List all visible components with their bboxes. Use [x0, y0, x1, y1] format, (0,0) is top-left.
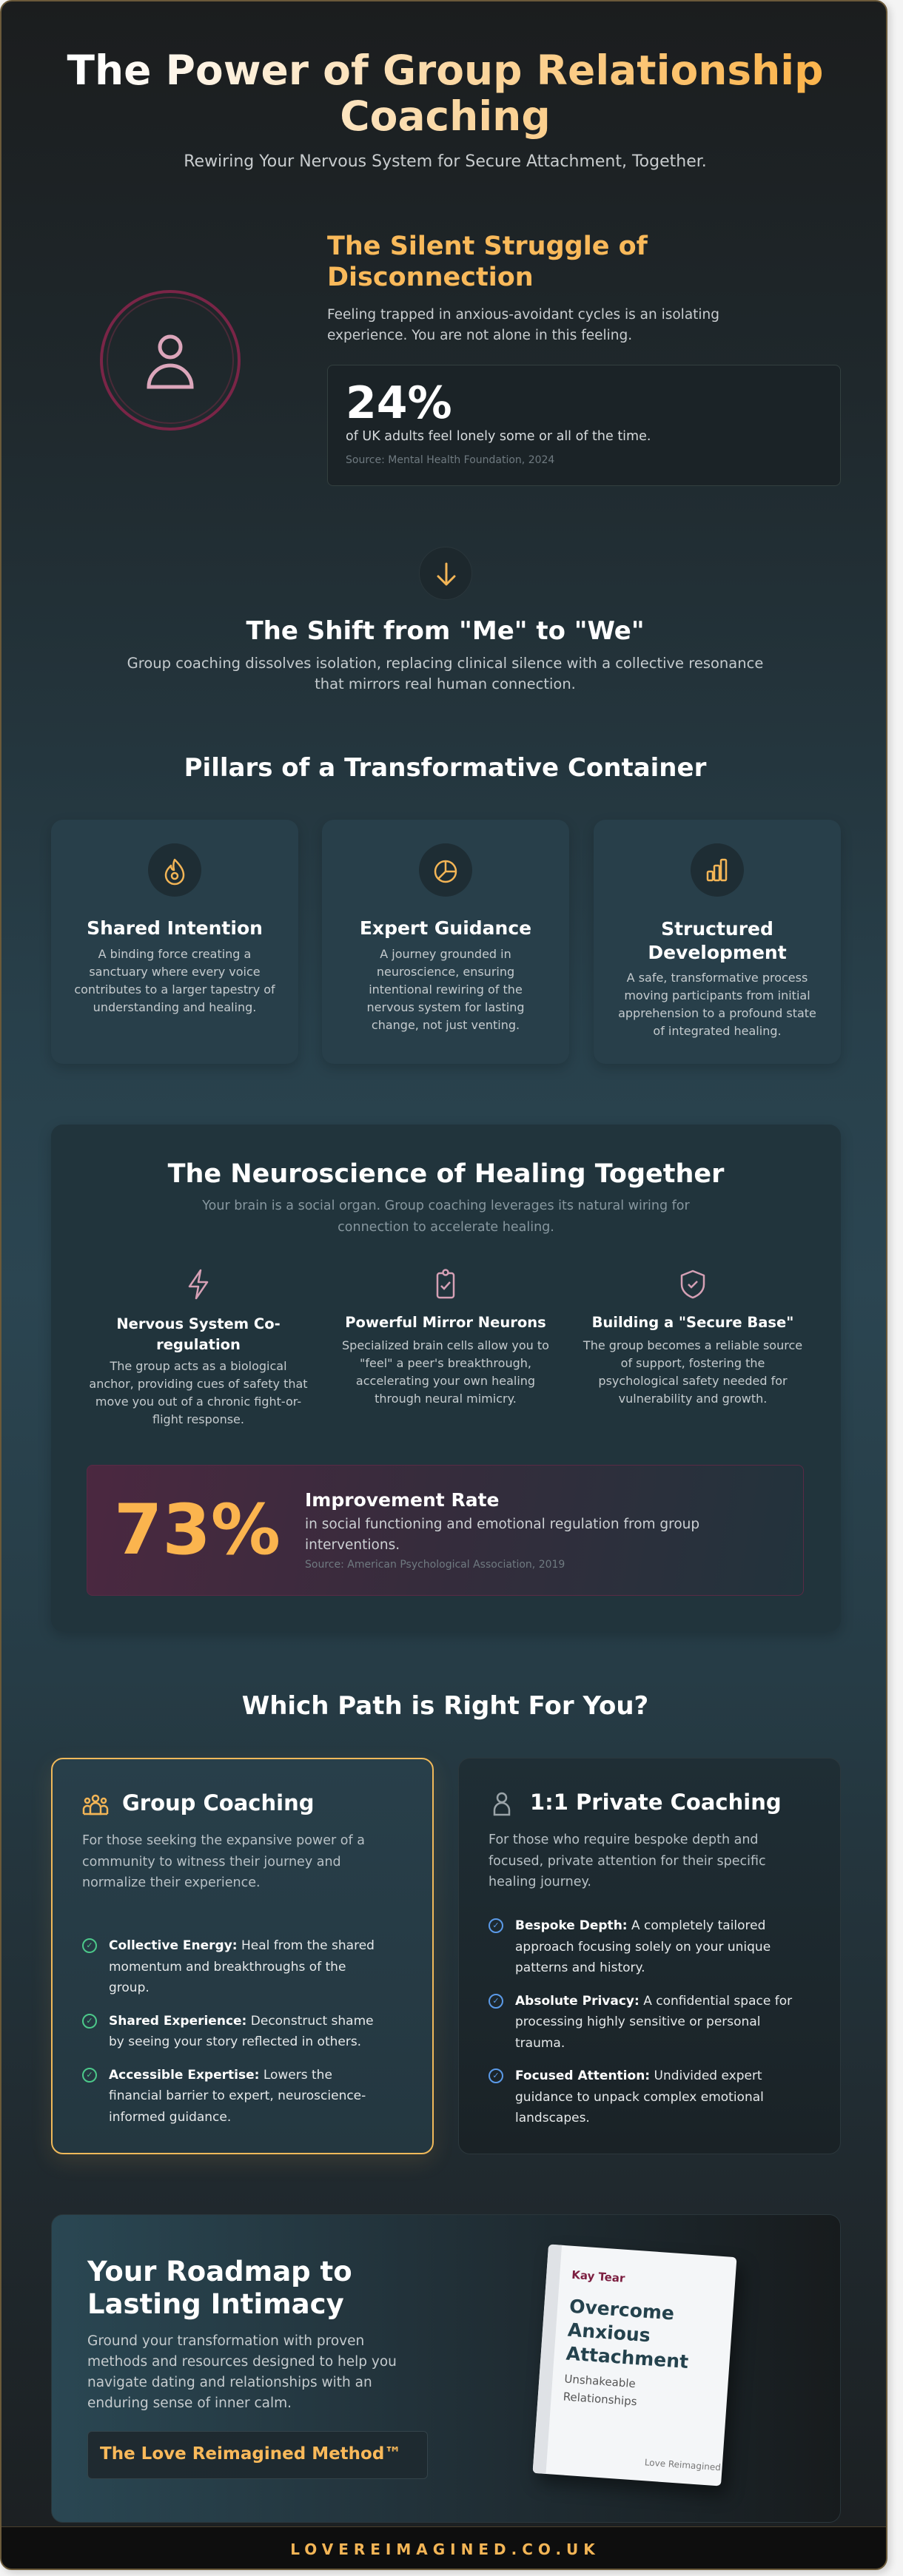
list: group benefits: ✓	[86, 2070, 93, 2079]
stat box 73%: Source: American Psychological Association, 2019	[305, 1559, 565, 1571]
item: secure base: Building a "Secure Base"	[592, 1314, 793, 1331]
item: secure base: The group becomes a reliable source of support, fostering the psychological safety needed for vulnerability and growth.	[583, 1338, 802, 1406]
panel: private coaching: For those who require bespoke depth and focused, private attention for their specific healing journey.	[489, 1832, 766, 1889]
stat box 24%	[327, 365, 841, 486]
heading: silent struggle	[327, 232, 648, 292]
book cover: Relationships	[563, 2390, 637, 2408]
list: group benefits: Shared Experience: Deconstruct shame by seeing your story reflected in others.	[109, 2014, 374, 2049]
item: co-regulation: The group acts as a biological anchor, providing cues of safety that move you out of a chronic fight-or-flight response.	[89, 1359, 308, 1426]
panel: shared intention: A binding force creating a sanctuary where every voice contributes to a larger tapestry of understanding and healing.	[74, 947, 275, 1014]
title: The Power of Group Relationship	[67, 47, 823, 94]
book cover: Kay Tear	[571, 2268, 625, 2285]
text: neuroscience intro: Your brain is a social organ. Group coaching leverages its natural wiring for	[202, 1198, 690, 1213]
stat box 24%: of UK adults feel lonely some or all of the time.	[346, 429, 651, 444]
book cover: Unshakeable	[564, 2372, 636, 2390]
text: struggle: experience. You are not alone in this feeling.	[327, 328, 632, 343]
stat box 73%: interventions.	[305, 1537, 400, 1553]
list: private benefits: Focused Attention: Undivided expert guidance to unpack complex emotional landscapes.	[515, 2068, 764, 2125]
text: shift: that mirrors real human connection.	[315, 675, 576, 692]
book cover: Attachment	[565, 2343, 689, 2373]
footer: LOVEREIMAGINED.CO.UK	[290, 2540, 600, 2558]
icon: bar chart	[691, 843, 744, 897]
icon: chart pie	[419, 843, 472, 897]
heading: silent struggle: The Silent Struggle of	[327, 232, 648, 261]
list: private benefits: Bespoke Depth: A completely tailored approach focusing solely on your unique patterns and history.	[515, 1918, 771, 1975]
title	[1, 47, 889, 139]
item: co-regulation: regulation	[156, 1336, 241, 1353]
stat box 73%: 73%	[114, 1490, 281, 1571]
icon: clipboard check	[437, 1269, 454, 1299]
book cover	[532, 2244, 737, 2486]
icon: lightning	[188, 1270, 209, 1299]
panel: neuroscience	[51, 1125, 841, 1631]
panel: group coaching: For those seeking the expansive power of a community to witness their journey and normalize their experience.	[82, 1833, 365, 1890]
icon: isolated person	[100, 290, 241, 431]
text: shift	[127, 655, 763, 692]
heading: which path: Which Path is Right For You?	[242, 1691, 648, 1721]
panel: group coaching: Group Coaching	[122, 1790, 314, 1815]
stat box 24%: Source: Mental Health Foundation, 2024	[346, 454, 554, 466]
text: struggle	[327, 307, 719, 343]
list: private benefits: ✓	[492, 2071, 500, 2080]
book cover: Anxious	[567, 2319, 651, 2346]
title: Coaching	[340, 92, 551, 140]
stat box 24%: 24%	[346, 377, 452, 429]
icon: person	[493, 1792, 511, 1815]
list: private benefits: Absolute Privacy: A confidential space for processing highly sensitive or personal trauma.	[515, 1993, 792, 2051]
text: struggle: Feeling trapped in anxious-avoidant cycles is an isolating	[327, 307, 719, 323]
panel: expert guidance: Expert Guidance	[360, 917, 531, 939]
heading: neuroscience: The Neuroscience of Healing Together	[168, 1159, 724, 1189]
text: neuroscience intro: connection to accelerate healing.	[338, 1220, 554, 1235]
text: shift: Group coaching dissolves isolation, replacing clinical silence with a collective resonance	[127, 655, 763, 672]
item: mirror neurons: Specialized brain cells allow you to "feel" a peer's breakthrough, accelerating your own healing through neural mimicry.	[342, 1338, 549, 1406]
list: group benefits: Accessible Expertise: Lowers the financial barrier to expert, neuroscience-informed guidance.	[109, 2067, 366, 2125]
list: private benefits	[489, 1918, 792, 2125]
stat box 73%	[87, 1465, 804, 1596]
list: private benefits: ✓	[492, 1921, 500, 1930]
book cover: Love Reimagined	[644, 2457, 721, 2472]
list: group benefits: ✓	[86, 2015, 93, 2026]
panel: structured development: A safe, transformative process moving participants from initial apprehension to a profound state of integrated healing.	[618, 971, 816, 1038]
panel: roadmap CTA	[51, 2214, 841, 2523]
item: secure base	[583, 1270, 802, 1406]
list: group benefits	[82, 1938, 375, 2125]
button: method	[87, 2431, 428, 2479]
panel: expert guidance: A journey grounded in neuroscience, ensuring intentional rewiring of the nervous system for lasting change, not just venting.	[367, 947, 524, 1032]
item: co-regulation	[89, 1270, 308, 1426]
icon: down arrow	[419, 547, 472, 600]
stat box 73%: Improvement Rate	[305, 1489, 499, 1511]
icon: flame	[148, 843, 201, 897]
book cover: Overcome	[568, 2296, 675, 2324]
stat box 73%: in social functioning and emotional regulation from group	[305, 1517, 699, 1532]
panel: shared intention: Shared Intention	[87, 917, 263, 939]
list: group benefits: ✓	[86, 1941, 93, 1950]
panel: structured development: Development	[648, 942, 787, 963]
footer	[1, 2526, 889, 2572]
panel: private coaching: 1:1 Private Coaching	[530, 1790, 782, 1815]
panel: structured development	[594, 820, 841, 1064]
panel: roadmap CTA: Lasting Intimacy	[87, 2288, 344, 2320]
button: method: The Love Reimagined Method™	[100, 2444, 401, 2464]
panel: expert guidance	[322, 820, 569, 1064]
subtitle: Rewiring Your Nervous System for Secure Attachment, Together.	[184, 152, 707, 171]
item: co-regulation: Nervous System Co-	[116, 1315, 281, 1332]
list: group benefits: Collective Energy: Heal from the shared momentum and breakthroughs of the group.	[109, 1938, 375, 1995]
text: neuroscience intro	[202, 1198, 690, 1235]
icon: shield check	[681, 1270, 705, 1299]
panel: roadmap CTA: Your Roadmap to	[87, 2256, 352, 2287]
panel: group coaching	[51, 1758, 434, 2154]
list: private benefits: ✓	[492, 1996, 500, 2005]
heading: pillars: Pillars of a Transformative Container	[184, 753, 706, 783]
item: mirror neurons: Powerful Mirror Neurons	[345, 1314, 546, 1331]
panel: private coaching	[458, 1758, 841, 2154]
item: mirror neurons	[342, 1269, 549, 1406]
panel: roadmap CTA: Ground your transformation with proven methods and resources designed to help you navigate dating and relationships with an enduring sense of inner calm.	[87, 2333, 397, 2411]
heading: shift: The Shift from "Me" to "We"	[246, 616, 645, 646]
panel: structured development: Structured	[661, 918, 773, 940]
heading: silent struggle: Disconnection	[327, 263, 534, 292]
icon: group	[83, 1795, 108, 1815]
panel: shared intention	[51, 820, 298, 1064]
